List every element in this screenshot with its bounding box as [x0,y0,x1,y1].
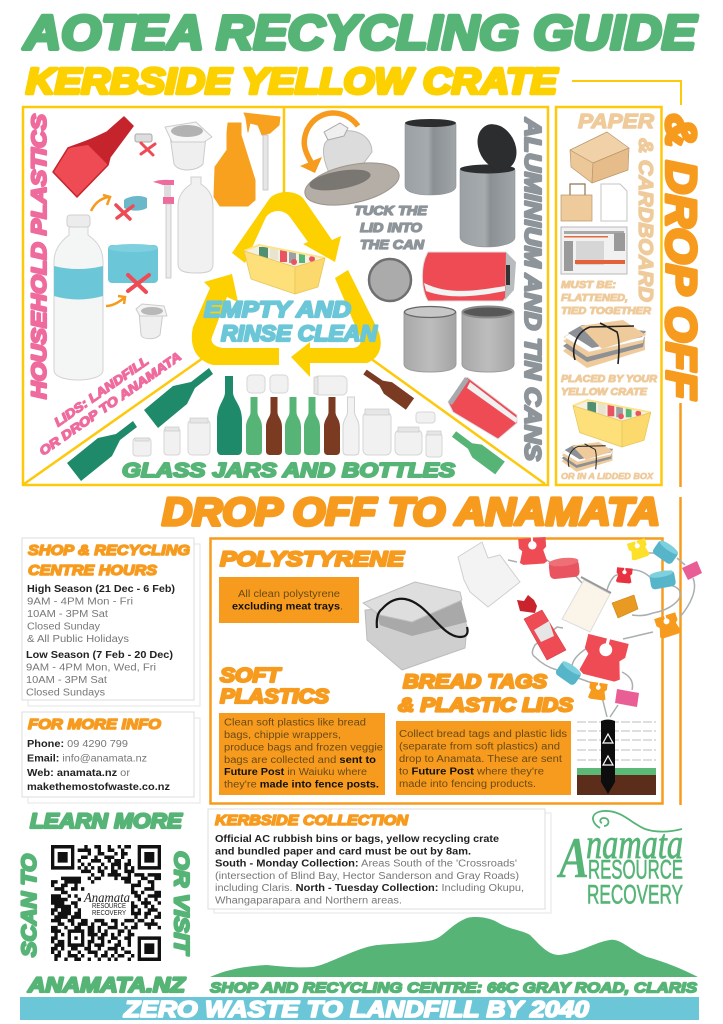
heading: soft plastics [220,665,330,708]
text: tuck the lid into the can: TUCK THE [354,204,428,218]
callout: bread tags and lids: to Future Post where they're [399,766,544,778]
callout: bread tags and lids: (separate from soft plastics) and [399,742,560,752]
heading: anamata.nz: ANAMATA.NZ [27,974,186,997]
callout: polystyrene [219,577,359,623]
callout: soft plastics: bags are collected and sent to [224,755,376,766]
icon: small red bottle [524,610,566,660]
callout: bread tags and lids: Collect bread tags and plastic lids [399,729,567,740]
callout: polystyrene: All clean polystyrene [238,589,340,600]
panel: for more info [22,712,200,803]
panel: kerbside collection: KERBSIDE COLLECTION [215,813,409,829]
lid: blue [651,538,680,565]
vertical heading: and drop off: & DROP OFF [656,114,704,401]
icon: paper document [601,184,627,221]
icon: orange curved arrow [300,113,358,173]
panel: shop and recycling centre hours: Closed Sundays [26,688,105,698]
qr centre logo: RECOVERY [92,908,126,917]
text: empty and rinse clean: RINSE CLEAN [221,321,378,346]
heading: drop off to anamata: DROP OFF TO ANAMATA [162,491,660,534]
icon: cardboard box [570,132,629,183]
panel: kerbside collection: including Claris. North - Tuesday Collection: Including Okupu, [215,883,524,894]
text: placed by your yellow crate: PLACED BY YOUR [561,374,658,385]
panel: shop and recycling centre hours: Low Season (7 Feb - 20 Dec) [26,650,173,661]
text: shop and recycling centre address: SHOP AND RECYCLING CENTRE: 66C GRAY ROAD, CLARIS [210,980,697,996]
logo: anamata resource recovery: A [557,825,589,890]
text: must be flattened, tied together: FLATTENED, [561,293,628,304]
panel: shop and recycling centre hours: SHOP & RECYCLING [28,542,190,559]
icon: bottles row [217,376,359,455]
logo: anamata resource recovery: namata [586,822,683,868]
heading: bread tags and plastic lids [398,671,573,716]
note: lids landfill or drop to anamata: OR DROP TO ANAMATA [37,349,184,458]
illustration: fence with recycled post [577,720,656,795]
heading: paper: PAPER [578,110,654,133]
tag: dark red [517,595,537,613]
qr code [51,847,161,959]
icon: small cap crossed out [135,134,155,155]
lid: blue three [554,659,583,686]
panel: kerbside collection: (intersection of Blind Bay, Hector Sanderson and Gray Roads) [215,871,519,882]
lid: blue two [649,569,676,590]
lid: orange [612,595,638,618]
heading: aluminium and tin cans: ALUMINIUM AND TIN CANS [520,117,546,462]
callout: soft plastics [219,713,385,795]
panel: shop and recycling centre hours [22,538,200,706]
icon: water bottle [54,215,103,380]
panel: shop and recycling centre hours: 9AM - 4PM Mon - Fri [27,596,133,608]
note: lids landfill or drop to anamata: LIDS: LANDFILL [52,354,151,429]
vertical heading: or visit: OR VISIT [170,851,192,956]
icon: red can diagonal [448,377,517,439]
qr centre logo: Anamata [83,891,130,906]
callout: bread tags and lids: drop to Anamata. These are sent [399,754,562,765]
callout: soft plastics: Clean soft plastics like bread [224,718,366,728]
heading: polystyrene: POLYSTYRENE [220,548,405,571]
panel: shop and recycling centre hours: 10AM - 3PM Sat [27,609,108,620]
icon: paper bag [561,184,592,221]
icon: blue lid crossed out [91,195,147,219]
tag: yellow [627,537,650,561]
panel: kerbside collection [208,809,551,913]
icon: red can on side [422,252,516,301]
text: placed by your yellow crate [561,374,658,398]
icon: small yoghurt pot [136,304,167,339]
panel: shop and recycling centre hours: High Season (21 Dec - 6 Feb) [27,584,175,595]
icon: polystyrene box [363,582,468,670]
panel: kerbside collection: Whangaparapara and Northern areas. [215,896,402,906]
icon: tin lid [369,259,411,301]
icon: yellow crate [573,400,651,447]
text: must be flattened, tied together [561,280,652,317]
panel: for more info: Email: info@anamata.nz [27,754,147,764]
icon: orange spray bottle [214,113,280,206]
panel: for more info: FOR MORE INFO [28,716,161,733]
callout: soft plastics: bags, chippie wrappers, [224,730,341,741]
heading: learn more: LEARN MORE [30,810,183,833]
callout: polystyrene: excluding meat trays . [232,602,343,612]
panel: kerbside collection: Official AC rubbish bins or bags, yellow recycling crate [215,834,499,845]
tag: small red [616,567,633,584]
icon: small tied bundle [562,442,613,472]
icon: tin can [405,119,456,195]
panel: for more info: Web: anamata.nz or [27,768,131,779]
text: empty and rinse clean: EMPTY AND [204,297,351,322]
text: must be flattened, tied together: MUST BE: [561,280,616,291]
panel: for more info: Phone: 09 4290 799 [27,739,128,750]
text: tuck the lid into the can: LID INTO [360,221,422,235]
icon: sardine tin with lid [301,123,403,213]
icon: chip packet [562,577,611,632]
qr centre logo [83,891,130,917]
lid: pink [615,689,639,707]
panel: paper and cardboard [556,107,662,485]
panel: drop off items [210,538,662,804]
vertical heading: household plastics: HOUSEHOLD PLASTICS [27,113,51,399]
panel: kerbside plastics, cans and glass [23,107,548,485]
tag: pink square [682,561,702,580]
text: or in a lidded box: OR IN A LIDDED BOX [561,471,654,481]
title: AOTEA RECYCLING GUIDE [23,7,698,60]
heading: soft plastics: SOFT [220,665,282,687]
heading: bread tags and plastic lids: BREAD TAGS [403,671,547,693]
recycling arrows [192,192,381,377]
tag: big red [579,632,629,683]
icon: pump dispenser [153,180,174,278]
icon: yellow crate with recycling [244,245,325,294]
connector line to drop off [572,81,681,105]
icon: open tin can with lid [460,117,524,247]
tag: orange [654,611,682,639]
vertical heading: scan to: SCAN TO [18,854,41,957]
icon: printed form [561,227,627,274]
panel: shop and recycling centre hours: 9AM - 4PM Mon, Wed, Fri [26,662,156,674]
orange side lines [679,403,682,805]
callout: bread tags and lids [396,721,571,795]
icon: green bottle diagonal [452,431,505,474]
icon: brown bottle diagonal [363,370,414,410]
icon: two tin cans [404,306,514,372]
callout: soft plastics: produce bags and frozen veggie [224,742,383,754]
icon: plastic cup [165,122,212,170]
panel: shop and recycling centre hours: 10AM - 3PM Sat [26,675,107,686]
illustration: mountain silhouette [210,917,698,977]
callout: soft plastics: they're made into fence posts. [224,780,379,790]
panel: shop and recycling centre hours: Closed Sunday [27,622,100,632]
icon: large blue lid crossed out [106,244,158,306]
panel: kerbside collection: and bundled paper and card must be out by 8am. [215,846,471,858]
panel: shop and recycling centre hours: & All Public Holidays [27,634,129,645]
text: must be flattened, tied together: TIED TOGETHER [561,306,652,317]
tag: red [518,536,547,565]
icon: red sauce bottle [53,117,133,197]
callout: bread tags and lids: made into fencing products. [399,779,536,790]
banner: zero waste to landfill by 2040: ZERO WASTE TO LANDFILL BY 2040 [123,996,589,1022]
panel: shop and recycling centre hours: CENTRE HOURS [28,562,157,579]
heading: glass jars and bottles: GLASS JARS AND BOTTLES [122,460,456,482]
text: tuck the lid into the can: THE CAN [360,238,425,252]
tag: small orange [588,681,608,701]
heading: kerbside yellow crate: KERBSIDE YELLOW CRATE [26,60,558,102]
text: empty and rinse clean [204,297,378,346]
callout: soft plastics: Future Post in Waiuku where [224,767,367,778]
icon: tied bundle of cardboard [563,320,646,368]
qr centre logo: RESOURCE [92,901,126,910]
icon: clear plastic bottle [178,177,213,273]
panel: for more info: makethemostofwaste.co.nz [27,782,170,793]
panel: kerbside collection: South - Monday Collection: Areas South of the 'Crossroads' [215,858,517,870]
banner: zero waste to landfill by 2040 [20,996,699,1022]
text: tuck the lid into the can [354,204,428,252]
lid: red [548,556,580,580]
heading: bread tags and plastic lids: & PLASTIC LIDS [398,694,573,716]
illustration: wire of tags and lids becoming a fence post [508,536,702,717]
heading: soft plastics: PLASTICS [220,686,330,708]
heading: and cardboard: & CARDBOARD [634,138,656,302]
text: placed by your yellow crate: YELLOW CRATE [561,387,647,398]
logo: anamata resource recovery [557,811,683,910]
illustration: white plastic bag [458,542,520,607]
icon: green wine bottles diagonal [67,368,213,481]
icon: glass jars [133,375,442,457]
